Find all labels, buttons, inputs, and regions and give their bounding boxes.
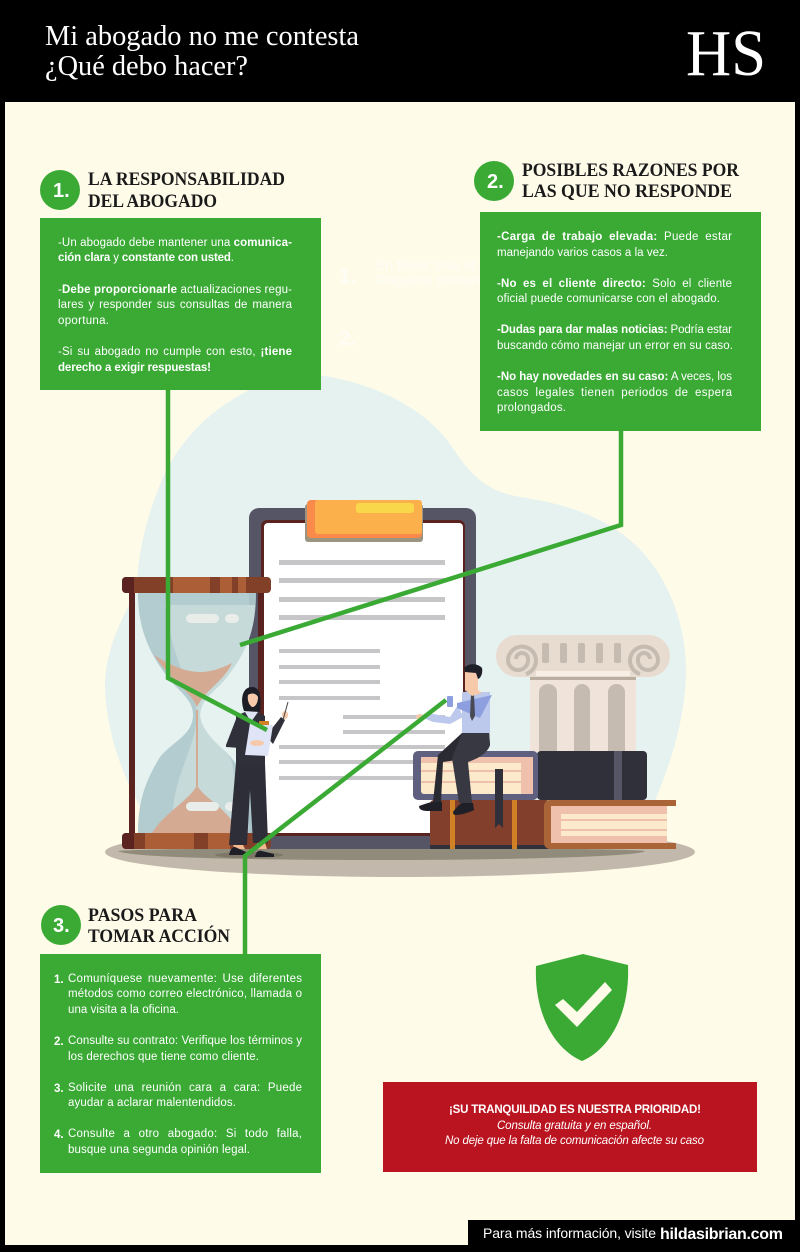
green text box 2: -No es el cliente directo: Solo el cliente xyxy=(497,278,732,290)
green text box 1: -Si su abogado no cumple con esto, ¡tiene xyxy=(58,346,292,358)
heading 1 xyxy=(88,169,285,212)
connector line: section 2 xyxy=(240,431,621,645)
green text box 2: -No hay novedades en su caso: A veces, los xyxy=(497,371,732,383)
green text box 1: oportuna. xyxy=(58,315,109,327)
green text box 2: buscando cómo manejar un error en su caso. xyxy=(497,340,733,352)
number badge 3 xyxy=(41,905,81,945)
heading 3: TOMAR ACCIÓN xyxy=(88,925,230,947)
faint background text: En línea: Use el xyxy=(376,257,475,273)
green text box 3: métodos como correo electrónico, llamada o xyxy=(68,988,302,1000)
green text box 2: -Carga de trabajo elevada: Puede estar xyxy=(497,231,732,243)
ground ellipse xyxy=(105,827,695,877)
number badge 2: 2. xyxy=(487,171,504,193)
background blob xyxy=(105,375,686,835)
heading 3 xyxy=(88,905,230,947)
green text box 3: 4. xyxy=(54,1129,64,1141)
green text box 1: -Debe proporcionarle actualizaciones regu- xyxy=(58,284,292,296)
footer bar with website xyxy=(468,1220,800,1252)
illustration: hourglass xyxy=(122,577,271,849)
green text box 3: ayudar a aclarar malentendidos. xyxy=(68,1097,236,1109)
green text box 2: casos legales tienen periodos de espera xyxy=(497,387,733,399)
callout: red priority banner: No deje que la falta de comunicación afecte su caso xyxy=(445,1135,705,1147)
green text box 3 xyxy=(40,954,321,1173)
green text box 3: Solicite una reunión cara a cara: Puede xyxy=(68,1082,302,1094)
panel 2: posibles razones xyxy=(474,160,761,431)
illustration: column xyxy=(496,635,670,752)
number badge 2 xyxy=(474,161,514,201)
green text box 2: prolongados. xyxy=(497,402,566,414)
green text box 2: oficial puede comunicarse con el abogado. xyxy=(497,293,720,305)
faint background text xyxy=(339,257,484,350)
green text box 1: ción clara y constante con usted. xyxy=(58,252,234,264)
green text box 3: 1. xyxy=(54,974,64,986)
heading 3: PASOS PARA xyxy=(88,905,197,926)
connector line: section 3 xyxy=(245,700,446,954)
faint background text: Requiere número xyxy=(376,272,484,288)
number badge 3: 3. xyxy=(53,915,70,937)
green text box 2: -Dudas para dar malas noticias: Podría estar xyxy=(497,324,732,336)
green text box 1: derecho a exigir respuestas! xyxy=(58,362,211,374)
footer bar with website: hildasibrian.com xyxy=(660,1226,783,1243)
footer bar with website: Para más información, visite xyxy=(483,1225,656,1241)
heading 2: LAS QUE NO RESPONDE xyxy=(522,181,732,202)
panel 1: la responsabilidad del abogado xyxy=(40,169,321,390)
heading 2: POSIBLES RAZONES POR xyxy=(522,160,739,181)
number badge 1: 1. xyxy=(53,180,70,202)
callout: red priority banner: ¡SU TRANQUILIDAD ES NUESTRA PRIORIDAD! xyxy=(449,1104,701,1116)
green text box 1: -Un abogado debe mantener una comunica- xyxy=(58,237,292,249)
callout: red priority banner xyxy=(383,1082,757,1172)
number badge 1 xyxy=(40,170,80,210)
panel 3: pasos para tomar accion xyxy=(40,905,321,1173)
green text box 3: Comuníquese nuevamente: Use diferentes xyxy=(68,973,302,985)
icon: green shield with check xyxy=(536,954,628,1061)
green text box 3: 3. xyxy=(54,1083,64,1095)
header title xyxy=(45,21,360,82)
green text box 1: lares y responder sus consultas de manera xyxy=(58,299,293,311)
green text box 3: Consulte a otro abogado: Si todo falla, xyxy=(68,1128,302,1140)
green text box 3: 2. xyxy=(54,1036,64,1048)
green text box 3: una visita a la oficina. xyxy=(68,1004,179,1016)
green text box 3: Consulte su contrato: Verifique los términos y xyxy=(68,1035,302,1047)
green text box 3: busque una segunda opinión legal. xyxy=(68,1144,250,1156)
heading 1: LA RESPONSABILIDAD xyxy=(88,169,285,190)
HS logo: HS xyxy=(686,17,766,90)
illustration: clipboard xyxy=(249,500,476,849)
illustration: stacked books xyxy=(413,751,676,849)
illustration: woman with clipboard xyxy=(226,687,288,857)
green text box 2: manejando varios casos a la vez. xyxy=(497,247,668,259)
green text box 2 xyxy=(480,212,761,431)
faint background text: 2. xyxy=(339,328,356,350)
connector line: section 1 xyxy=(168,390,267,730)
faint background text: 1. xyxy=(339,266,356,288)
header title: Mi abogado no me contesta xyxy=(45,21,360,52)
header title: ¿Qué debo hacer? xyxy=(45,51,248,82)
callout: red priority banner: Consulta gratuita y en español. xyxy=(497,1120,652,1132)
heading 1: DEL ABOGADO xyxy=(88,191,217,212)
green text box 1 xyxy=(40,218,321,390)
green text box 3: los derechos que tiene como cliente. xyxy=(68,1051,259,1063)
heading 2 xyxy=(522,160,739,202)
illustration: man sitting with phone xyxy=(416,664,492,815)
